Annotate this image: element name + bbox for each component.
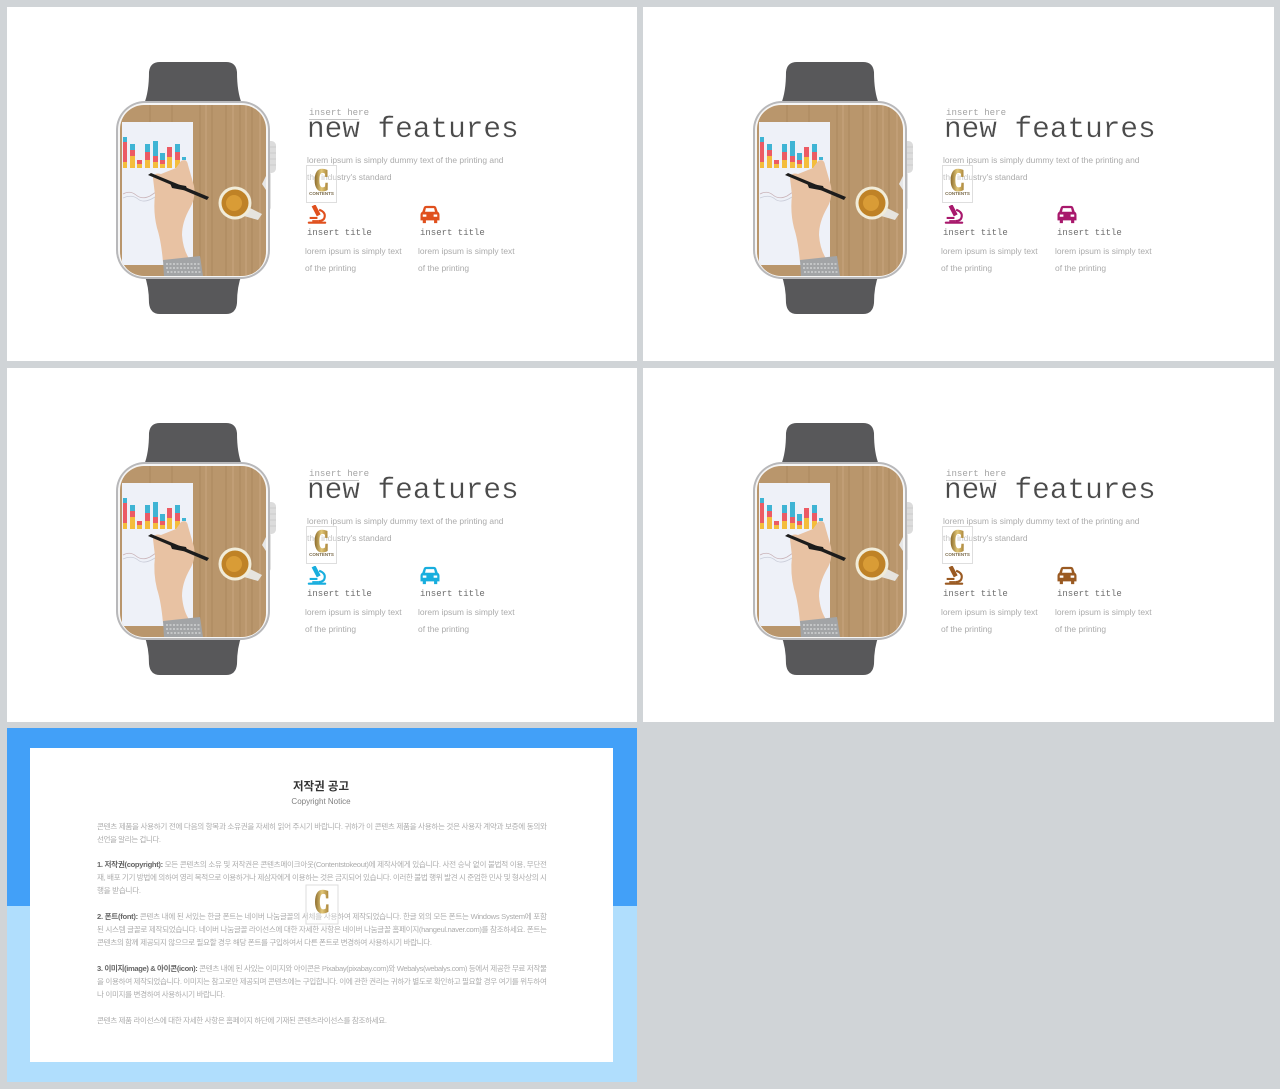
paragraph 1 copyright	[97, 859, 547, 895]
paragraph 3 image and icon: 나 이미지를 변경하여 사용하시기 바랍니다.	[97, 989, 225, 999]
notice title: 저작권 공고	[293, 779, 349, 793]
watch with photo	[116, 62, 276, 314]
feature text left: lorem ipsum is simply text	[305, 607, 402, 617]
feature text right: lorem ipsum is simply text	[418, 246, 515, 256]
paragraph 2 font: 된 시스템 글꼴로 제작되었습니다. 네이버 나눔글꼴 라이선스에 대한 자세한 사항은 네이버 나눔글꼴 홈페이지(hangeul.naver.com)를 참조하세요. 폰트는	[97, 924, 547, 934]
paragraph 2 font: 콘텐츠의 함께 제공되지 않으므로 필요할 경우 해당 폰트를 구입하여서 다른 폰트로 변경하여 사용하시기 바랍니다.	[97, 937, 432, 947]
feature text left: lorem ipsum is simply text	[941, 246, 1038, 256]
feature text left: of the printing	[941, 263, 992, 273]
eyebrow text: insert here	[309, 107, 369, 118]
icon: microscope	[308, 566, 326, 585]
panel: slide 3 cyan	[7, 368, 637, 722]
icon: car	[420, 566, 440, 584]
intro paragraph: 콘텐츠 제품을 사용하기 전에 다음의 항목과 소유권을 자세히 읽어 주시기 바랍니다. 귀하가 이 콘텐츠 제품을 사용하는 것은 사용자 계약과 보증에 동의와	[97, 821, 547, 831]
logo watermark	[306, 526, 337, 564]
watch with photo	[116, 423, 276, 675]
intro paragraph	[97, 821, 547, 844]
feature text right	[418, 246, 515, 273]
logo watermark: CONTENTS	[309, 191, 334, 196]
intro text: lorem ipsum is simply dummy text of the printing and	[943, 516, 1139, 526]
heading: new features	[307, 474, 519, 507]
logo watermark	[306, 883, 338, 924]
intro text	[307, 155, 503, 182]
panel: slide 1 orange	[7, 7, 637, 361]
heading: new features	[307, 113, 519, 146]
feature text left: lorem ipsum is simply text	[305, 246, 402, 256]
intro text	[307, 516, 503, 543]
paragraph 1 copyright: 재, 배포 기기 방법에 의하여 영리 목적으로 이용하거나 제삼자에게 이용하는 것은 금지되어 있습니다. 이러한 불법 행위 발견 시 준엄한 민사 및 형사상의 시	[97, 872, 547, 882]
icon: microscope	[944, 205, 964, 224]
intro paragraph: 선언을 알리는 겁니다.	[97, 834, 161, 844]
paragraph 3 image and icon	[97, 963, 547, 999]
feature text left: of the printing	[941, 624, 992, 634]
logo watermark: CONTENTS	[309, 552, 334, 557]
feature text right: of the printing	[418, 624, 469, 634]
feature text right: lorem ipsum is simply text	[1055, 607, 1152, 617]
feature text left: of the printing	[305, 263, 356, 273]
feature text right	[1055, 246, 1152, 273]
feature text left	[941, 246, 1038, 273]
feature title right: insert title	[420, 228, 485, 238]
logo watermark	[306, 165, 337, 203]
logo watermark	[942, 526, 973, 564]
icon: car	[1058, 206, 1076, 224]
notice subtitle: Copyright Notice	[291, 797, 351, 806]
panel: slide 2 magenta	[643, 7, 1274, 361]
intro text: the industry's standard	[307, 172, 392, 182]
feature text right: of the printing	[1055, 263, 1106, 273]
watch with photo	[753, 62, 913, 314]
intro text: lorem ipsum is simply dummy text of the printing and	[943, 155, 1139, 165]
closing line: 콘텐츠 제품 라이선스에 대한 자세한 사항은 홈페이지 하단에 기재된 콘텐츠라이선스를 참조하세요.	[97, 1015, 387, 1025]
intro text: the industry's standard	[943, 172, 1028, 182]
paragraph 2 font: 2. 폰트(font): 콘텐츠 내에 된 서있는 한글 폰트는 네이버 나눔글꼴의 서체를 사용하여 제작되었습니다. 한글 외의 모든 폰트는 Windows System에 포함	[97, 911, 547, 921]
paragraph 1 copyright: 1. 저작권(copyright): 모든 콘텐츠의 소유 및 저작권은 콘텐츠메이크아웃(Contentstokeout)에 제작사에게 있습니다. 사전 승낙 없이 불법적 이용, 무단전	[97, 859, 547, 869]
icon: car	[1058, 566, 1076, 584]
paragraph 3 image and icon: 을 이용하여 제작되었습니다. 이미지는 참고로만 제공되며 콘텐츠에는 구입합니다. 이에 관한 권리는 귀하가 별도로 확인하고 필요할 경우 여기를 위두하여	[97, 976, 547, 986]
feature text right: lorem ipsum is simply text	[418, 607, 515, 617]
eyebrow text: insert here	[946, 107, 1006, 118]
feature text left: lorem ipsum is simply text	[941, 607, 1038, 617]
heading: new features	[944, 474, 1156, 507]
watch with photo	[753, 423, 913, 675]
intro text: the industry's standard	[307, 533, 392, 543]
feature title right: insert title	[1057, 228, 1122, 238]
feature title right: insert title	[420, 589, 485, 599]
feature title left: insert title	[307, 589, 372, 599]
feature title left: insert title	[943, 589, 1008, 599]
feature text right: of the printing	[1055, 624, 1106, 634]
logo watermark	[942, 165, 973, 203]
icon: microscope	[944, 566, 964, 585]
feature title left: insert title	[307, 228, 372, 238]
logo watermark: CONTENTS	[945, 191, 970, 196]
intro text: lorem ipsum is simply dummy text of the printing and	[307, 516, 503, 526]
feature title right: insert title	[1057, 589, 1122, 599]
icon: car	[420, 206, 440, 224]
intro text: the industry's standard	[943, 533, 1028, 543]
intro text: lorem ipsum is simply dummy text of the printing and	[307, 155, 503, 165]
feature text right: lorem ipsum is simply text	[1055, 246, 1152, 256]
feature text right: of the printing	[418, 263, 469, 273]
feature text right	[1055, 607, 1152, 634]
notice card	[30, 748, 613, 1062]
panel: slide 4 brown	[643, 368, 1274, 722]
logo watermark: CONTENTS	[945, 552, 970, 557]
panel: copyright notice	[7, 728, 637, 1082]
feature text left	[305, 246, 402, 273]
feature text left	[941, 607, 1038, 634]
feature text left: of the printing	[305, 624, 356, 634]
intro text	[943, 516, 1139, 543]
icon: microscope	[308, 205, 326, 224]
eyebrow text: insert here	[946, 468, 1006, 479]
feature text right	[418, 607, 515, 634]
feature text left	[305, 607, 402, 634]
logo watermark: C	[315, 883, 329, 919]
intro text	[943, 155, 1139, 182]
heading: new features	[944, 113, 1156, 146]
eyebrow text: insert here	[309, 468, 369, 479]
paragraph 3 image and icon: 3. 이미지(image) & 아이콘(icon): 콘텐츠 내에 된 사있는 이미지와 아이콘은 Pixabay(pixabay.com)와 Webalys(webalys.com) 등에서 제공한 무료 저작물	[97, 963, 547, 973]
feature title left: insert title	[943, 228, 1008, 238]
paragraph 2 font	[97, 911, 547, 947]
paragraph 1 copyright: 행을 받습니다.	[97, 885, 141, 895]
